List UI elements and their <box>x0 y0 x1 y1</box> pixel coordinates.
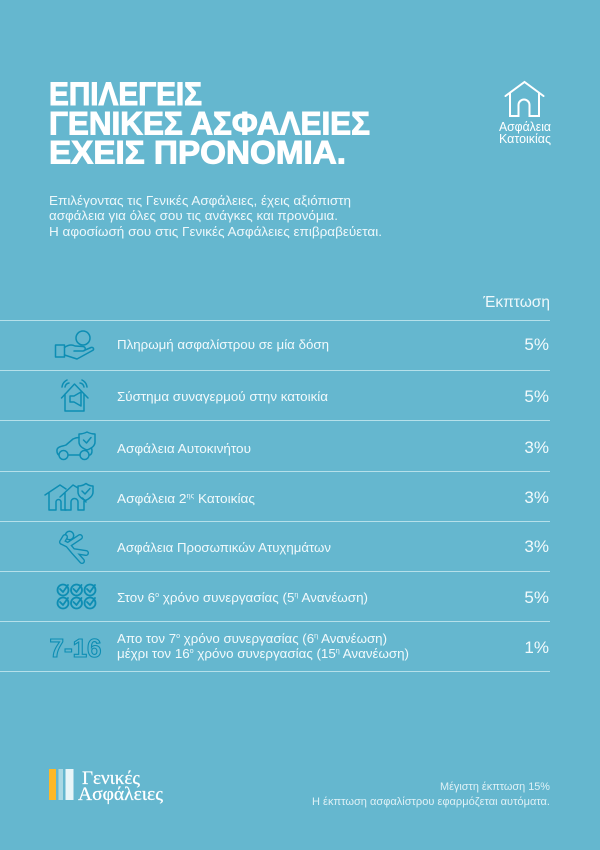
row label: ο <box>176 633 180 640</box>
row: second home <box>45 484 549 510</box>
logo stripes <box>49 769 74 800</box>
title: ΕΧΕΙΣ ΠΡΟΝΟΜΙΑ. <box>49 134 346 170</box>
row label: χρόνο συνεργασίας (15 <box>194 646 336 661</box>
row label: Ανανέωση) <box>298 590 368 605</box>
row: sixth year <box>58 584 549 608</box>
logo wordmark: Ασφάλειες <box>78 784 163 805</box>
row label: Ανανέωση) <box>318 631 387 646</box>
icon: house <box>506 82 544 116</box>
table rules <box>0 320 550 672</box>
row label: ο <box>155 592 159 599</box>
icon: house with alarm <box>62 380 88 411</box>
logo wordmark <box>78 768 163 805</box>
row label: Πληρωμή ασφαλίστρου σε μία δόση <box>117 337 329 352</box>
title: ΓΕΝΙΚΕΣ ΑΣΦΑΛΕΙΕΣ <box>49 106 370 142</box>
row label: Ανανέωση) <box>340 646 409 661</box>
row label: Ασφάλεια 2 <box>117 491 183 506</box>
icon: 7-16 outlined numerals: 7-16 <box>50 633 102 663</box>
icon: two houses with shield <box>45 484 93 510</box>
title: ΕΠΙΛΕΓΕΙΣ <box>49 76 202 112</box>
row value: 5% <box>524 335 549 354</box>
row label: η <box>314 633 318 640</box>
row label: η <box>294 592 299 599</box>
row value: 3% <box>524 488 549 507</box>
column heading: discount: Έκπτωση <box>482 294 550 311</box>
row value: 1% <box>524 638 549 657</box>
logo wordmark: Γενικές <box>82 768 140 789</box>
icon: falling person <box>62 531 86 561</box>
row label: Απο τον 7 <box>117 631 175 646</box>
row label: χρόνο συνεργασίας (6 <box>180 631 314 646</box>
title <box>49 76 370 170</box>
badge: home insurance <box>499 82 551 146</box>
logo: Γενικές Ασφάλειες <box>49 768 163 805</box>
row value: 5% <box>524 387 549 406</box>
row label: Στον 6 <box>117 590 154 605</box>
row label: Ασφάλεια Προσωπικών Ατυχημάτων <box>117 540 331 555</box>
row label: η <box>336 648 340 655</box>
badge label: Ασφάλεια <box>499 120 551 134</box>
icon: six check marks <box>58 584 96 608</box>
row: personal accident <box>62 531 549 561</box>
row: alarm <box>62 380 549 411</box>
row label: ο <box>190 648 194 655</box>
row: single payment <box>56 331 549 359</box>
icon: car with shield <box>57 432 95 460</box>
row label: ης <box>187 493 195 500</box>
row: seventh to sixteenth year <box>50 631 549 663</box>
row label: Σύστημα συναγερμού στην κατοικία <box>117 389 328 404</box>
row value: 3% <box>524 438 549 457</box>
row label: μέχρι τον 16 <box>117 646 188 661</box>
row label: Ασφάλεια Αυτοκινήτου <box>117 441 251 456</box>
badge label: Κατοικίας <box>499 132 551 146</box>
row value: 3% <box>524 537 549 556</box>
intro text: Επιλέγοντας τις Γενικές Ασφάλειες, έχεις αξιόπιστη <box>49 193 351 208</box>
footnote <box>312 781 550 808</box>
footnote: Μέγιστη έκπτωση 15% <box>440 781 550 793</box>
icon: hand with coin <box>56 331 94 359</box>
row value: 5% <box>524 588 549 607</box>
row label: χρόνο συνεργασίας (5 <box>159 590 294 605</box>
intro text: Η αφοσίωσή σου στις Γενικές Ασφάλειες επιβραβεύεται. <box>49 224 382 239</box>
intro text: ασφάλεια για όλες σου τις ανάγκες και προνόμια. <box>49 208 338 223</box>
intro text <box>49 193 382 239</box>
row: car insurance <box>57 432 549 460</box>
footnote: Η έκπτωση ασφαλίστρου εφαρμόζεται αυτόματα. <box>312 796 550 808</box>
row label <box>117 631 409 661</box>
badge label <box>499 120 551 146</box>
row label: Κατοικίας <box>194 491 255 506</box>
